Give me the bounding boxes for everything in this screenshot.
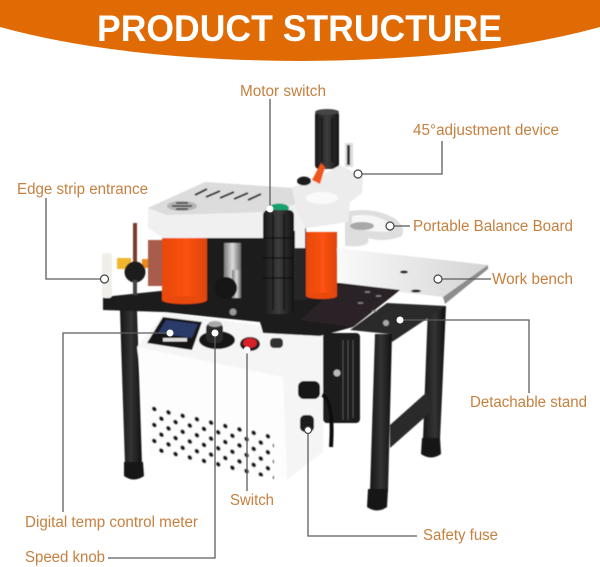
power socket [298, 381, 320, 399]
label: detachable stand [396, 316, 587, 411]
label: 45 degree adjustment device: 45°adjustment device [413, 122, 559, 139]
speed knob [199, 321, 235, 349]
base box [137, 312, 325, 480]
rear grip handle [315, 109, 339, 169]
label: speed knob: Speed knob [25, 549, 105, 566]
label: safety fuse: Safety fuse [423, 527, 498, 544]
header banner [0, 0, 600, 61]
right orange roller [306, 232, 337, 299]
white guide strip [295, 205, 305, 248]
stand plate [350, 303, 446, 342]
safety fuse holder [300, 415, 314, 432]
label: digital temp control meter [25, 330, 198, 531]
label: safety fuse [304, 426, 498, 544]
label: edge strip entrance [17, 181, 148, 283]
label: portable balance board: Portable Balance Board [413, 218, 573, 235]
rear block [148, 240, 162, 286]
angle adjustment mount [292, 143, 363, 228]
label: edge strip entrance: Edge strip entrance [17, 181, 148, 198]
work bench [337, 248, 488, 304]
label: detachable stand: Detachable stand [470, 394, 587, 411]
label: digital temp control meter: Digital temp control meter [25, 514, 198, 531]
label: motor switch [240, 83, 326, 212]
label: work bench [434, 271, 573, 288]
label: speed knob [25, 330, 218, 566]
edge banding machine [102, 109, 488, 510]
label: work bench: Work bench [492, 271, 573, 288]
screw post [270, 338, 283, 348]
ventilation holes [150, 405, 274, 479]
left leg [120, 310, 144, 480]
label: 45 degree adjustment device [354, 122, 559, 178]
left orange roller [162, 238, 207, 304]
motor switch button [269, 204, 289, 212]
label: switch: Switch [230, 492, 274, 509]
balance board [345, 210, 403, 246]
motor [322, 333, 360, 447]
digital temperature meter [147, 317, 202, 350]
center mechanism [206, 236, 264, 308]
edge strip guide [102, 223, 161, 298]
rocker switch [240, 337, 260, 351]
front grip handle [263, 210, 294, 314]
support posts [293, 228, 306, 300]
near right stand leg [367, 334, 392, 510]
main black table plate [103, 283, 400, 336]
title: PRODUCT STRUCTURE [97, 8, 502, 49]
far right stand leg [390, 306, 446, 458]
label: switch [230, 346, 274, 509]
top casing [148, 182, 350, 238]
label: motor switch: Motor switch [240, 83, 326, 100]
